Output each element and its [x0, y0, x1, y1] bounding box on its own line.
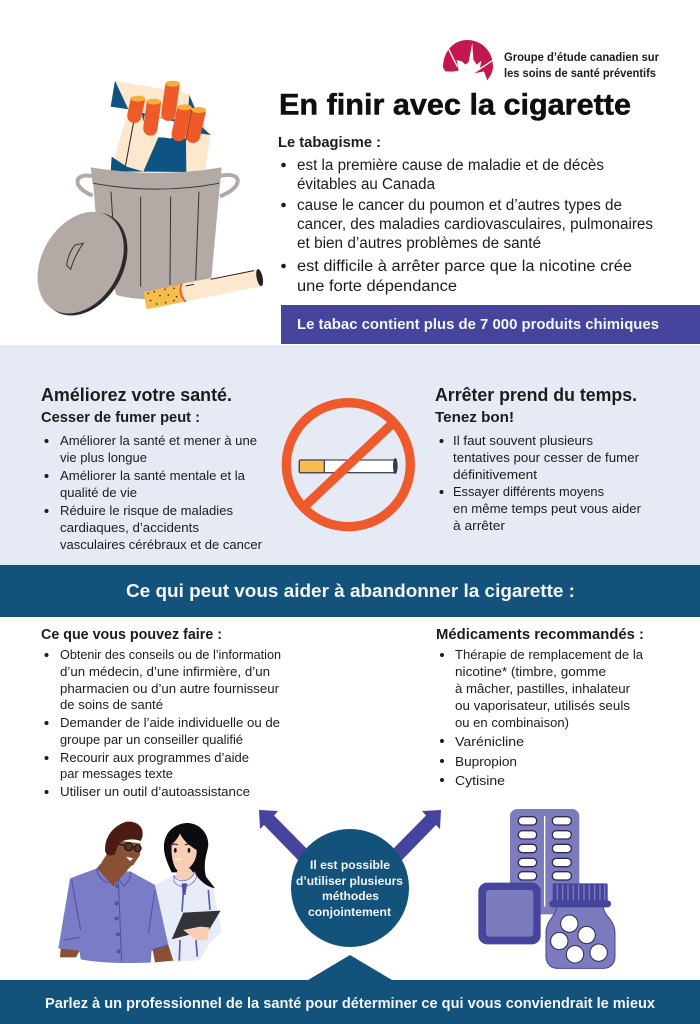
patch [478, 883, 541, 944]
illustration: medications [478, 809, 615, 968]
section banner: Ce qui peut vous aider à abandonner la cigarette : [126, 581, 575, 601]
column: improve your health: Améliorer la santé et mener à une [60, 433, 257, 448]
callout circle: Il est possible [310, 860, 390, 872]
logo [443, 40, 659, 80]
column: what you can do: Obtenir des conseils ou de l’information [60, 647, 281, 662]
column: improve your health: cardiaques, d’accidents [60, 520, 200, 535]
column: recommended medications: Varénicline [455, 734, 524, 749]
intro bullets: cause le cancer du poumon et d’autres types de [297, 197, 622, 214]
column: recommended medications: à mâcher, pastilles, inhalateur [455, 681, 631, 696]
column: improve your health: qualité de vie [60, 485, 137, 500]
intro text block [278, 134, 653, 295]
intro bullets: est difficile à arrêter parce que la nicotine crée [297, 258, 632, 275]
column: what you can do: de soins de santé [60, 697, 163, 712]
column: recommended medications: Médicaments recommandés : [436, 627, 644, 643]
column: what you can do [41, 627, 281, 799]
column: quitting takes time: Tenez bon! [435, 409, 514, 426]
logo mark [443, 40, 493, 80]
column: improve your health [41, 385, 263, 552]
callout circle: d’utiliser plusieurs [296, 876, 403, 888]
callout: chemicals: Le tabac contient plus de 7 000 produits chimiques [297, 317, 659, 333]
logo text: Groupe d’étude canadien sur [504, 52, 659, 64]
loose cigarette [143, 269, 264, 309]
icon: no smoking [286, 403, 410, 527]
column: improve your health: Améliorer la santé mentale et la [60, 468, 246, 483]
intro bullets: et bien d’autres problèmes de santé [297, 235, 541, 252]
column: improve your health: vie plus longue [60, 450, 147, 465]
blister pack [510, 809, 579, 914]
column: what you can do: Recourir aux programmes d’aide [60, 750, 249, 765]
intro bullets: une forte dépendance [297, 278, 457, 295]
panel: health and persistence [0, 345, 700, 565]
illustration: patient and health professional [58, 822, 222, 963]
man [58, 822, 173, 963]
logo text [504, 52, 659, 80]
trash can lid [20, 196, 145, 331]
callout circle: méthodes [322, 891, 379, 903]
column: what you can do: groupe par un conseiller qualifié [60, 732, 243, 747]
column: recommended medications: nicotine* (timbre, gomme [455, 664, 606, 679]
column: what you can do: pharmacien ou d’un autre fournisseur [60, 681, 280, 696]
column: quitting takes time: définitivement [453, 467, 537, 482]
illustration: cigarettes in a trash can [20, 81, 264, 331]
column: recommended medications: Cytisine [455, 773, 505, 788]
column: improve your health: vasculaires cérébraux et de cancer [60, 537, 263, 552]
column: what you can do: Utiliser un outil d’autoassistance [60, 784, 250, 799]
section banner [0, 565, 700, 617]
column: quitting takes time: en même temps peut vous aider [453, 501, 642, 516]
intro bullets: est la première cause de maladie et de décès [297, 157, 604, 174]
column: recommended medications: Bupropion [455, 754, 517, 769]
column: what you can do: d’un médecin, d’une infirmière, d’un [60, 664, 270, 679]
intro bullets: évitables au Canada [297, 176, 435, 193]
trash can [77, 167, 238, 300]
intro bullets: cancer, des maladies cardiovasculaires, pulmonaires [297, 216, 653, 233]
column: recommended medications: Thérapie de remplacement de la [455, 647, 644, 662]
column: what you can do: par messages texte [60, 766, 173, 781]
column: quitting takes time [435, 385, 642, 533]
column: what you can do: Ce que vous pouvez faire : [41, 627, 222, 643]
pill bottle [546, 883, 615, 968]
column: improve your health: Cesser de fumer peut : [41, 409, 200, 426]
callout circle [291, 829, 409, 947]
column: what you can do: Demander de l’aide individuelle ou de [60, 715, 280, 730]
column: quitting takes time: à arrêter [453, 518, 506, 533]
column: improve your health: Réduire le risque de maladies [60, 503, 234, 518]
column: recommended medications: ou vaporisateur, utilisés seuls [455, 698, 631, 713]
column: quitting takes time: Essayer différents moyens [453, 484, 604, 499]
bottom banner: Parlez à un professionnel de la santé pour déterminer ce qui vous conviendrait le mieux [45, 996, 655, 1012]
intro heading: Le tabagisme : [278, 134, 381, 151]
arrows [259, 810, 441, 861]
arrow: up-left [259, 810, 309, 861]
logo text: les soins de santé préventifs [504, 68, 656, 80]
bottom banner [0, 955, 700, 1024]
column: recommended medications [436, 627, 644, 788]
column: quitting takes time: Il faut souvent plusieurs [453, 433, 594, 448]
arrow: up-right [391, 810, 441, 861]
column: quitting takes time: Arrêter prend du temps. [435, 385, 637, 405]
column: improve your health: Améliorez votre santé. [41, 385, 232, 405]
column: quitting takes time: tentatives pour cesser de fumer [453, 450, 640, 465]
callout circle: conjointement [308, 907, 391, 919]
column: recommended medications: ou en combinaison) [455, 715, 569, 730]
callout: chemicals [281, 305, 700, 344]
woman [155, 823, 222, 962]
intro bullets [281, 157, 653, 295]
cigarette pack [111, 81, 211, 172]
title: En finir avec la cigarette [279, 88, 631, 122]
